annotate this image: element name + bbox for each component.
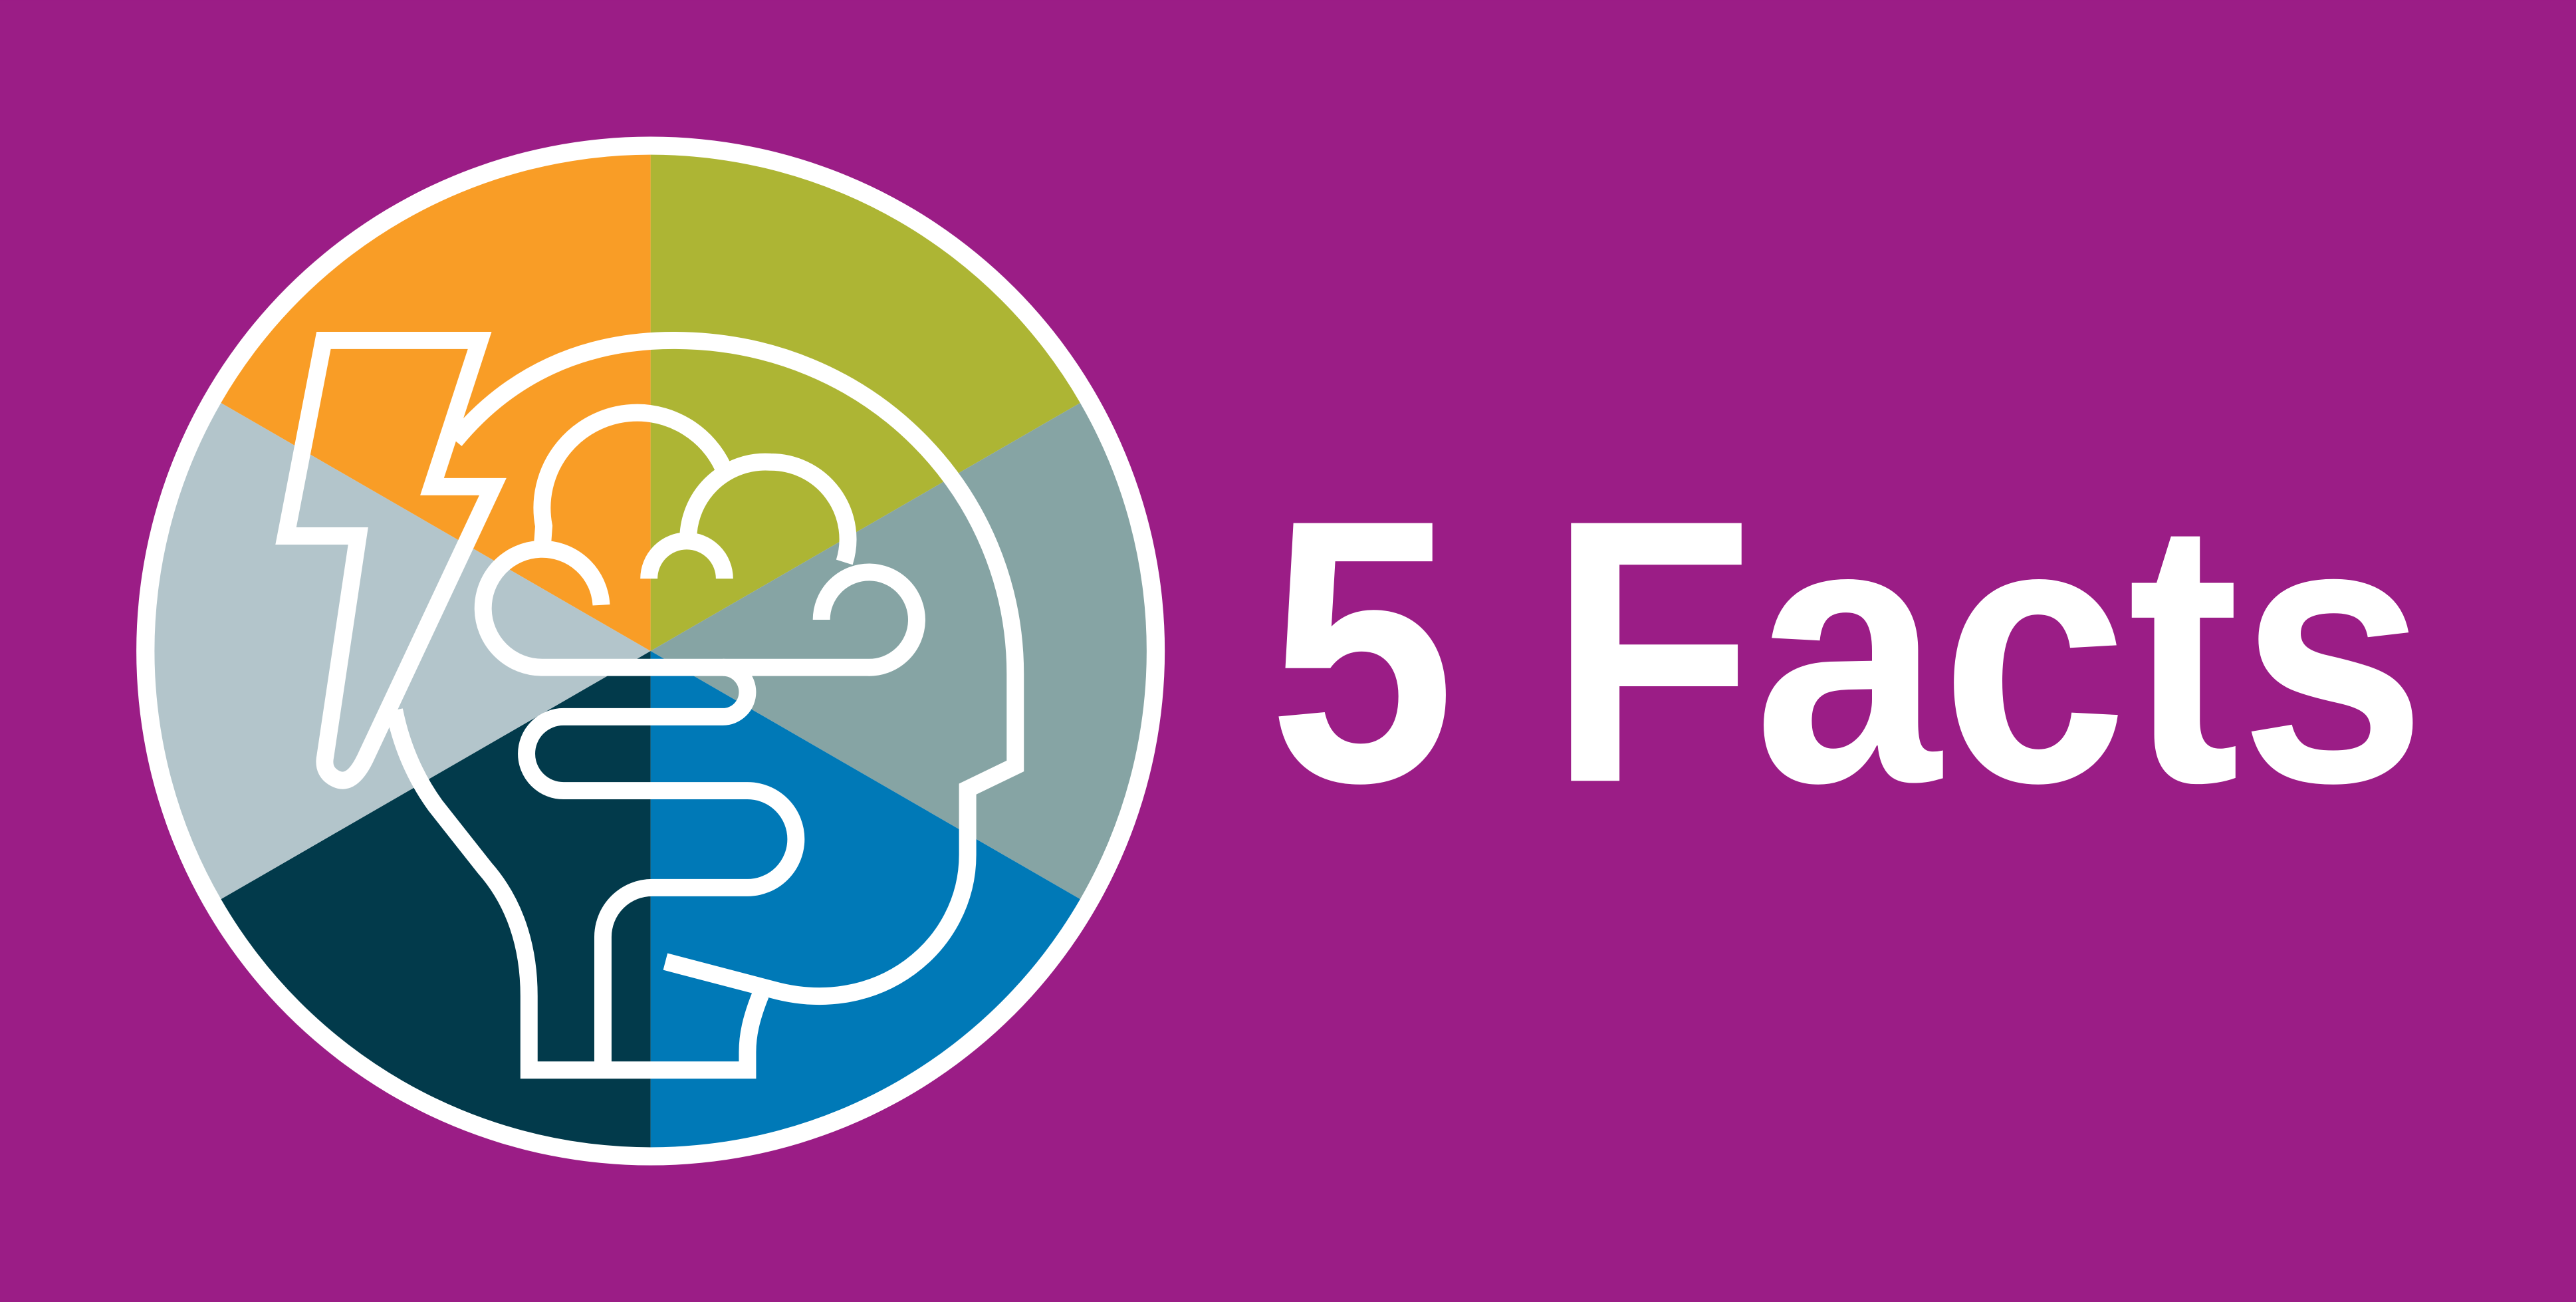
head outline upper — [455, 340, 1015, 996]
wedge: navy — [221, 651, 651, 1147]
icon: head with cloud and lightning — [286, 340, 1015, 1070]
emblem: colored circle with head — [136, 136, 1165, 1166]
swirl — [527, 668, 796, 1070]
wedge: light grey — [154, 403, 651, 899]
wedge: grey-teal — [651, 403, 1147, 899]
wedge: olive — [651, 155, 1080, 651]
lightning bolt — [286, 340, 493, 781]
wedge: blue — [651, 651, 1080, 1147]
head outline lower — [394, 710, 761, 1070]
title: 5 Facts: 5 Facts — [1268, 442, 2426, 860]
cloud — [483, 549, 917, 668]
wedge: orange — [221, 155, 651, 651]
